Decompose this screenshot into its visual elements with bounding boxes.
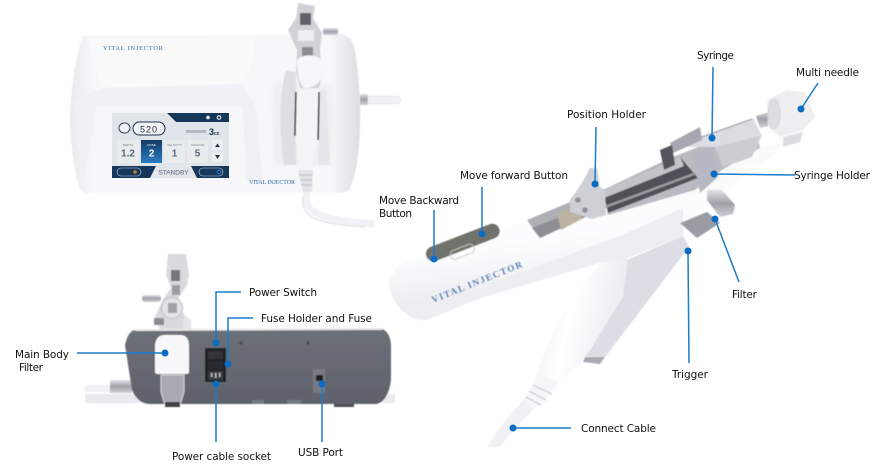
callout: Main Body Filter: Filter [19, 362, 44, 374]
console body [70, 34, 360, 193]
callout: Multi needle [796, 67, 859, 112]
callout: Syringe Holder: Syringe Holder [794, 170, 871, 182]
touch screen: 1.2 [121, 148, 135, 160]
callout: Syringe Holder [710, 170, 871, 182]
handpiece seen from rear [142, 254, 191, 330]
rail slot [527, 200, 592, 238]
grey rear housing [125, 329, 391, 404]
panel: main console front view [70, 3, 401, 227]
callout: Connect Cable [510, 423, 656, 435]
filter [680, 190, 735, 238]
callout: Trigger [671, 248, 709, 381]
cable [487, 400, 533, 447]
callout: Filter [712, 216, 758, 301]
panel: handpiece injector [389, 90, 815, 447]
touch screen: 5 [195, 148, 201, 160]
rear grey clamp [670, 127, 702, 153]
callout: Position Holder: Position Holder [567, 109, 647, 121]
touch screen: 3cc [209, 127, 220, 137]
docked handpiece [288, 3, 375, 227]
button panel [424, 222, 502, 264]
logo on handpiece: VITAL INJECTOR [430, 260, 524, 306]
needle connector [756, 110, 778, 128]
callout: Trigger: Trigger [671, 369, 709, 381]
barrel shaded lower band [392, 208, 683, 320]
callout: Power Switch: Power Switch [249, 287, 317, 299]
callout: Filter: Filter [732, 289, 758, 301]
grip [537, 258, 628, 382]
callout: Move forward Button [460, 170, 568, 238]
strain relief [523, 373, 560, 410]
callout: Power cable socket [172, 380, 271, 463]
touch screen: 520 [140, 124, 158, 134]
callout: Multi needle: Multi needle [796, 67, 859, 79]
callout: Connect Cable: Connect Cable [581, 423, 656, 435]
callout: Main Body Filter [15, 349, 168, 374]
position holder [570, 168, 606, 219]
callout: Move Backward Button: Button [379, 208, 412, 220]
callout: Syringe [697, 50, 734, 142]
panel: rear view of console [85, 254, 395, 407]
callout: USB Port [298, 380, 343, 459]
touch screen: VELOCITY [167, 143, 182, 147]
upper panel facet [88, 39, 255, 88]
rail backing [603, 125, 760, 215]
brand logo upper: VITAL INJECTOR [103, 45, 164, 52]
feet [334, 404, 354, 407]
cable [306, 192, 375, 224]
grip clip [583, 357, 605, 364]
multi needle head [767, 90, 815, 147]
touch screen: DEPTH [123, 143, 133, 147]
callout: Fuse Holder and Fuse [224, 313, 372, 368]
callout: Syringe: Syringe [697, 50, 734, 62]
callout: USB Port: USB Port [298, 447, 343, 459]
rear connector and cable [360, 94, 368, 105]
rear cables [85, 385, 125, 392]
USB port [313, 369, 325, 393]
rail and barrel [603, 157, 698, 213]
callout: Move Backward Button: Move Backward [379, 195, 459, 207]
touch screen: 2 [149, 148, 155, 160]
touch screen [112, 113, 229, 178]
callout: Move Backward Button [379, 195, 459, 262]
touch screen: VACUUM [191, 143, 204, 147]
grip grey facet [585, 236, 689, 357]
callout: Power cable socket: Power cable socket [172, 451, 271, 463]
touch screen: 1 [172, 148, 178, 160]
syringe [670, 118, 762, 167]
brand logo lower: VITAL INJECTOR [249, 180, 295, 186]
callout: Main Body Filter: Main Body [15, 349, 69, 361]
callout: Move forward Button: Move forward Button [460, 170, 568, 182]
main body filter unit [155, 335, 189, 407]
touch screen: STANDBY [158, 170, 189, 176]
barrel white body [389, 142, 783, 320]
callout: Power Switch [212, 287, 317, 346]
callout: Position Holder [567, 109, 647, 188]
power inlet module [205, 348, 226, 382]
syringe holder [693, 147, 718, 193]
gun dock recess [273, 84, 333, 165]
touch screen: DOSE [147, 143, 156, 147]
callout: Fuse Holder and Fuse: Fuse Holder and Fuse [261, 313, 372, 325]
